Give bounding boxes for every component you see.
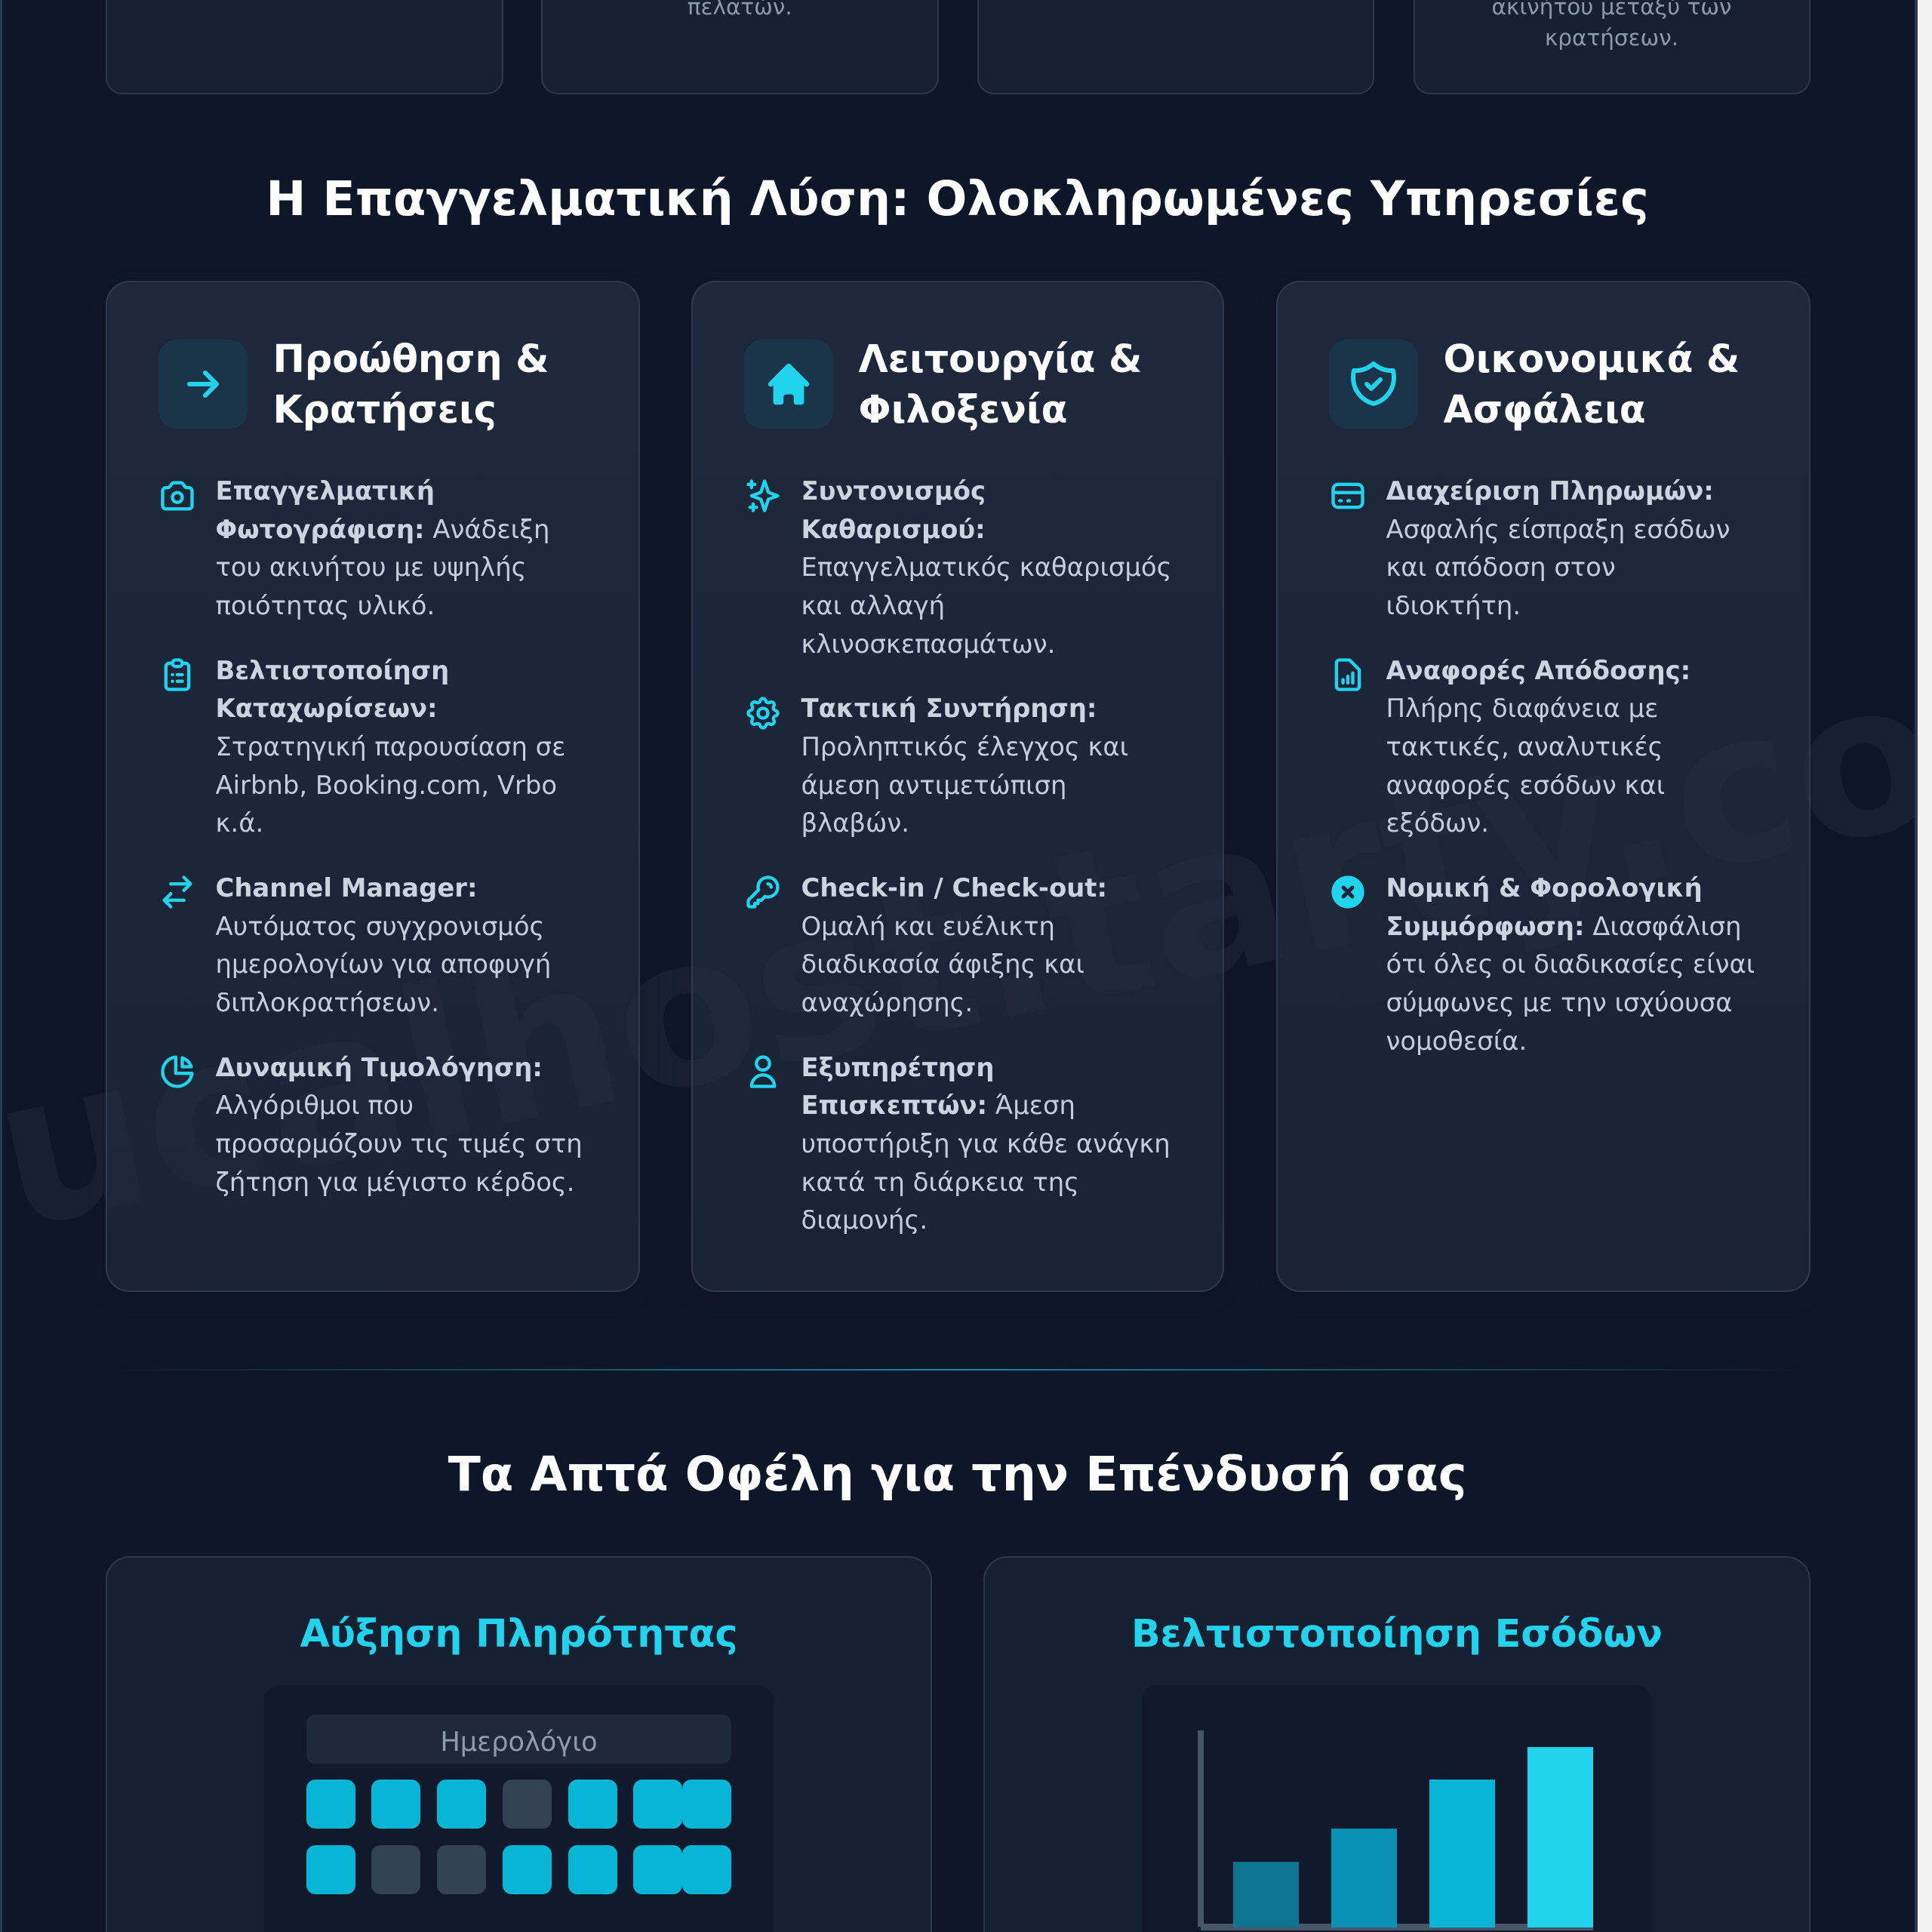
panel: promotion and bookings: [106, 281, 640, 1292]
service list: [1331, 476, 1755, 1056]
card title: Οικονομικά &: [1443, 337, 1740, 381]
item: cleaning: και αλλαγή: [801, 591, 945, 620]
heading: solution: Η Επαγγελματική Λύση: Ολοκληρωμένες Υπηρεσίες: [266, 171, 1649, 226]
item: photography: Επαγγελματική: [216, 476, 435, 506]
item: listings: Βελτιστοποίηση: [216, 656, 449, 685]
item: channel manager: ημερολογίων για αποφυγή: [216, 949, 551, 979]
item: dynamic pricing: Δυναμική Τιμολόγηση:: [216, 1053, 543, 1082]
item: cleaning: κλινοσκεπασμάτων.: [801, 629, 1055, 659]
item: payments: και απόδοση στον: [1386, 552, 1616, 582]
calendar header: Ημερολόγιο: [440, 1727, 598, 1758]
card title: [1443, 337, 1740, 432]
item: reports: Αναφορές Απόδοσης:: [1386, 656, 1690, 685]
item: check-in: [746, 873, 1107, 1017]
panel: finance and security: [1276, 281, 1810, 1292]
item: listings: Στρατηγική παρουσίαση σε: [216, 732, 565, 761]
item: dynamic pricing: [161, 1053, 583, 1197]
item: maintenance: [746, 694, 1128, 838]
item: maintenance: Προληπτικός έλεγχος και: [801, 732, 1128, 761]
item: guest service: Επισκεπτών: Άμεση: [801, 1091, 1075, 1120]
service list: [746, 476, 1171, 1235]
bar chart: [1142, 1685, 1651, 1932]
panel: revenue: [983, 1556, 1810, 1932]
item: guest service: διαμονής.: [801, 1205, 928, 1235]
card title: [273, 337, 549, 432]
item: dynamic pricing: Αλγόριθμοι που: [216, 1091, 414, 1120]
item: payments: Ασφαλής είσπραξη εσόδων: [1386, 515, 1730, 544]
item: payments: ιδιοκτήτη.: [1386, 591, 1521, 620]
item: reports: [1334, 656, 1690, 838]
card title: Λειτουργία &: [859, 337, 1142, 381]
panel: occupancy: [106, 1556, 932, 1932]
item: channel manager: [163, 873, 551, 1017]
item: maintenance: Τακτική Συντήρηση:: [801, 694, 1097, 723]
item: guest service: κατά τη διάρκεια της: [801, 1168, 1079, 1197]
item: listings: Airbnb, Booking.com, Vrbo: [216, 771, 557, 800]
item: check-in: Ομαλή και ευέλικτη: [801, 912, 1055, 941]
benefit title: Αύξηση Πληρότητας: [300, 1611, 738, 1656]
card title: Φιλοξενία: [859, 387, 1067, 432]
item: check-in: αναχώρησης.: [801, 988, 973, 1017]
item: guest service: [750, 1053, 1171, 1235]
calendar header: [306, 1715, 731, 1764]
item: photography: Φωτογράφιση: Ανάδειξη: [216, 515, 549, 544]
panel: top card 4: κρατήσεων.: [1545, 25, 1678, 51]
item: check-in: Check-in / Check-out:: [801, 873, 1107, 903]
item: compliance: Συμμόρφωση: Διασφάλιση: [1386, 912, 1742, 941]
card title: Ασφάλεια: [1443, 387, 1646, 432]
panel: operations and hospitality: [691, 281, 1224, 1292]
card title: Προώθηση &: [273, 337, 549, 381]
panel: top card 2: [541, 0, 939, 94]
item: listings: [165, 656, 565, 838]
card title: Κρατήσεις: [273, 387, 497, 432]
item: guest service: Εξυπηρέτηση: [801, 1053, 994, 1082]
item: check-in: διαδικασία άφιξης και: [801, 949, 1084, 979]
item: compliance: νομοθεσία.: [1386, 1026, 1527, 1056]
item: cleaning: Συντονισμός: [801, 476, 986, 506]
item: photography: [161, 476, 549, 620]
item: reports: Πλήρης διαφάνεια με: [1386, 694, 1658, 723]
item: photography: ποιότητας υλικό.: [216, 591, 435, 620]
item: photography: του ακινήτου με υψηλής: [216, 552, 527, 582]
item: cleaning: [746, 476, 1171, 659]
icon: shield check: [1329, 340, 1418, 429]
item: maintenance: βλαβών.: [801, 808, 909, 838]
item: payments: Διαχείριση Πληρωμών:: [1386, 476, 1714, 506]
item: listings: κ.ά.: [216, 808, 263, 838]
item: compliance: σύμφωνες με την ισχύουσα: [1386, 988, 1733, 1017]
panel: top card 3: [977, 0, 1374, 94]
item: compliance: Νομική & Φορολογική: [1386, 873, 1703, 903]
item: maintenance: άμεση αντιμετώπιση: [801, 771, 1066, 800]
item: cleaning: Καθαρισμού:: [801, 515, 986, 544]
calendar chart: [264, 1685, 774, 1932]
item: guest service: υποστήριξη για κάθε ανάγκη: [801, 1129, 1171, 1158]
item: compliance: ότι όλες οι διαδικασίες είναι: [1386, 949, 1755, 979]
item: reports: αναφορές εσόδων και: [1386, 771, 1665, 800]
service list: [161, 476, 583, 1197]
item: cleaning: Επαγγελματικός καθαρισμός: [801, 552, 1171, 582]
card title: [859, 337, 1142, 432]
panel: top card 1: [106, 0, 503, 94]
item: channel manager: Channel Manager:: [216, 873, 477, 903]
item: dynamic pricing: προσαρμόζουν τις τιμές στη: [216, 1129, 583, 1158]
item: compliance: [1331, 873, 1755, 1056]
item: reports: εξόδων.: [1386, 808, 1489, 838]
icon: arrow right: [158, 340, 248, 429]
panel: top card 4: [1413, 0, 1810, 94]
item: payments: [1331, 476, 1730, 620]
icon: home: [744, 340, 833, 429]
item: reports: τακτικές, αναλυτικές: [1386, 732, 1663, 761]
item: listings: Καταχωρίσεων:: [216, 694, 438, 723]
item: dynamic pricing: ζήτηση για μέγιστο κέρδος.: [216, 1168, 575, 1197]
benefit title: Βελτιστοποίηση Εσόδων: [1131, 1611, 1663, 1656]
item: channel manager: διπλοκρατήσεων.: [216, 988, 439, 1017]
item: channel manager: Αυτόματος συγχρονισμός: [216, 912, 544, 941]
heading: benefits: Τα Απτά Οφέλη για την Επένδυσή σας: [448, 1446, 1466, 1502]
